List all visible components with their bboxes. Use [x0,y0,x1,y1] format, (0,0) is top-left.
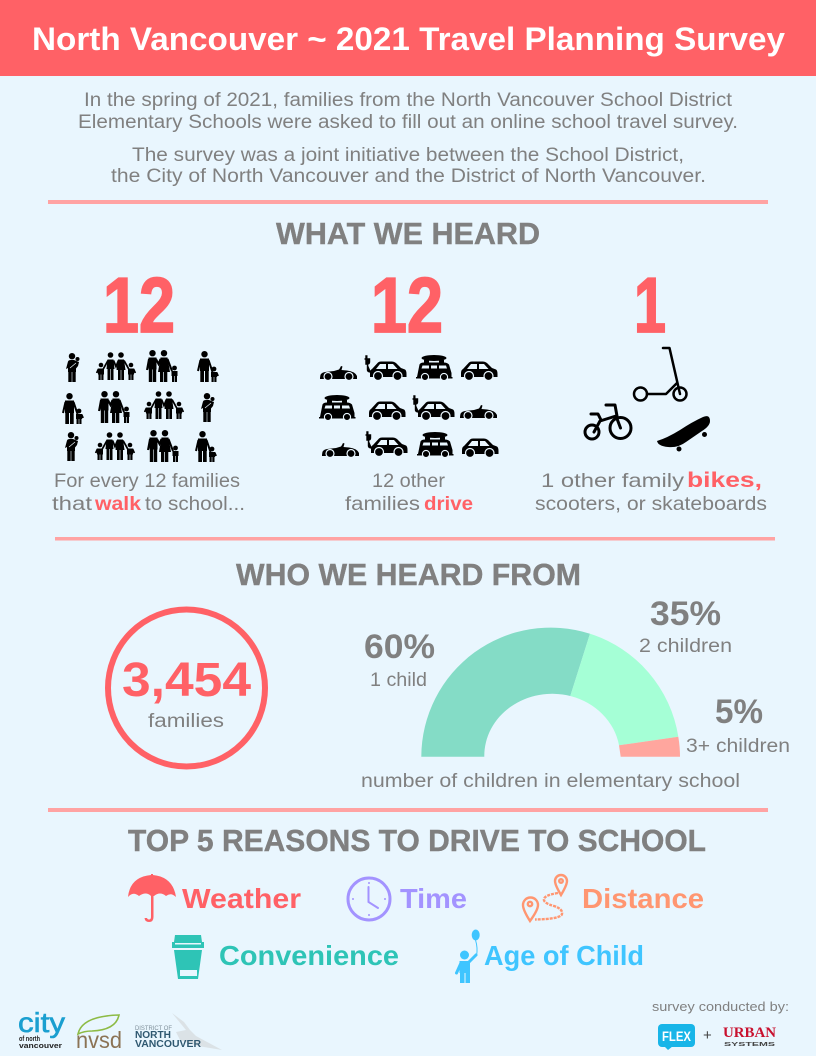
intro text [78,90,738,187]
title: North Vancouver ~ 2021 Travel Planning Survey [32,21,785,57]
label: 60% [364,628,435,691]
chart caption: number of children in elementary school [361,771,740,792]
caption: bike: scooters, or skateboards [535,493,767,515]
survey credits: survey conducted by: [652,999,789,1014]
logo: city of north vancouver: city [18,1007,65,1038]
caption: walk: to school... [145,493,245,515]
logo: district of north vancouver: VANCOUVER [135,1039,202,1050]
logo: district of north vancouver: NORTH [135,1030,171,1041]
reason: distance: Distance [582,883,704,914]
label: 5% [686,693,790,757]
header banner [0,0,816,76]
caption: bike [535,469,767,515]
caption: walk: walk [94,493,141,515]
logo: urban systems: SYSTEMS [724,1042,776,1048]
logo: district of north vancouver: DISTRICT OF [135,1025,172,1032]
intro text: In the spring of 2021, families from the North Vancouver School District [84,90,733,111]
label: 35% [639,595,732,657]
panel: drive [319,261,498,515]
caption: bike: bikes, [687,469,762,492]
icon: skateboard [657,416,710,452]
logo: nvsd [76,1015,122,1053]
logo: city of north vancouver: vancouver [19,1041,62,1050]
reason: convenience: Convenience [219,940,399,971]
icon: scooter [634,348,686,400]
heading: who we heard from: WHO WE HEARD FROM [236,557,581,592]
survey credits: + [703,1027,712,1044]
icons: cars [319,355,498,458]
label: 35%: 2 children [639,636,732,657]
caption: walk: For every 12 families [54,470,240,492]
intro text: Elementary Schools were asked to fill out an online school travel survey. [78,112,738,133]
icon: tricycle [585,405,631,439]
reason: time [348,878,467,920]
caption: bike: 1 other family [541,470,684,492]
survey credits [652,999,789,1050]
label: 35%: 35% [650,595,721,633]
reason: distance [523,875,704,921]
panel: bike [535,261,767,515]
number: 12 drive: 12 [371,261,443,349]
reason: age of child: Age of Child [484,940,644,971]
logo: district of north vancouver [135,1013,222,1050]
logo: city of north vancouver [18,1007,65,1050]
reason: age of child [456,930,644,983]
icon: child with balloon [456,930,480,983]
caption: drive: 12 other [372,470,446,492]
intro text: the City of North Vancouver and the District of North Vancouver. [111,166,706,187]
intro text: The survey was a joint initiative between the School District, [132,145,684,166]
caption: walk [52,470,245,515]
panel: families count: 3,454 [122,654,251,707]
icon: route pins [523,875,567,921]
caption: drive: drive [424,493,473,515]
reason: time: Time [400,883,467,914]
number: 12 walk: 12 [103,261,175,349]
chart: number of children [361,595,790,792]
label: 60%: 60% [364,628,435,666]
reason: weather [128,874,301,922]
panel: families count: families [148,711,224,732]
logo: nvsd: nvsd [76,1027,122,1053]
panel: walk [52,261,245,515]
label: 60%: 1 child [370,670,427,691]
label: 5%: 3+ children [686,736,790,757]
panel: families count [108,610,265,766]
icon: coffee cup [172,935,204,979]
heading: top 5 reasons: TOP 5 REASONS TO DRIVE TO SCHOOL [128,823,706,858]
logo: urban systems: URBAN [723,1025,776,1041]
icon: umbrella [128,874,176,922]
icons: families [63,350,218,462]
logo: urban systems [723,1025,776,1048]
caption: drive [345,470,473,515]
reason: convenience [172,935,399,979]
icon: clock [348,878,390,920]
reason: weather: Weather [182,883,301,914]
caption: walk: that [52,493,93,515]
logo: flex: FLEX [662,1028,692,1044]
label: 5%: 5% [715,693,763,731]
logo: city of north vancouver: of north [19,1034,40,1043]
heading: what we heard: WHAT WE HEARD [276,216,540,251]
caption: drive: families [345,493,420,515]
number: 1: 1 [634,261,666,349]
